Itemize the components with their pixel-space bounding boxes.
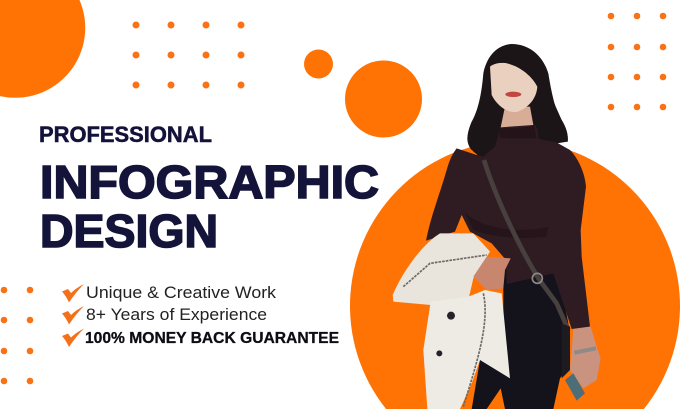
white coat upper fold [393, 233, 490, 305]
circle: top left decoration [0, 0, 85, 98]
dot grid: top right [608, 13, 666, 110]
text: years of experience: 8+ Years of Experience [86, 306, 267, 324]
hand holding coat [473, 257, 511, 290]
checklist [62, 284, 339, 347]
icon: check 1 [62, 284, 84, 302]
white coat lower part [423, 290, 510, 409]
icon: check 3 [62, 328, 84, 347]
text: unique and creative work: Unique & Creative Work [86, 284, 277, 302]
coat seam [403, 255, 487, 407]
trousers [472, 263, 570, 409]
sweater and arms [426, 125, 590, 329]
back hair [467, 44, 568, 150]
bag strap [484, 160, 568, 330]
fringe [493, 58, 538, 88]
face [490, 63, 537, 112]
dot grid: bottom left [1, 287, 33, 384]
coat buttons [447, 312, 455, 320]
bag [562, 323, 570, 378]
phone [565, 373, 585, 401]
heading: infographic: INFOGRAPHIC [40, 156, 379, 208]
bracelet [574, 348, 596, 353]
circle: small top [304, 50, 333, 78]
neck [501, 107, 533, 127]
sweater shadow under bust [465, 213, 548, 238]
circle: medium [345, 60, 422, 138]
buckle [532, 273, 542, 283]
lips [505, 92, 521, 97]
wrist and hand with phone [570, 327, 601, 388]
collar [499, 125, 537, 138]
text: money back guarantee: 100% MONEY BACK GUARANTEE [85, 330, 339, 347]
circle: large behind portrait [350, 141, 680, 409]
heading: professional: PROFESSIONAL [39, 122, 212, 147]
heading: design: DESIGN [40, 205, 218, 257]
front hair lock [467, 100, 500, 157]
icon: check 2 [62, 306, 84, 324]
portrait: woman holding a white coat [393, 44, 601, 409]
notch between legs [487, 388, 505, 409]
dot grid: top centre [132, 22, 244, 88]
right hair lock [537, 90, 568, 142]
